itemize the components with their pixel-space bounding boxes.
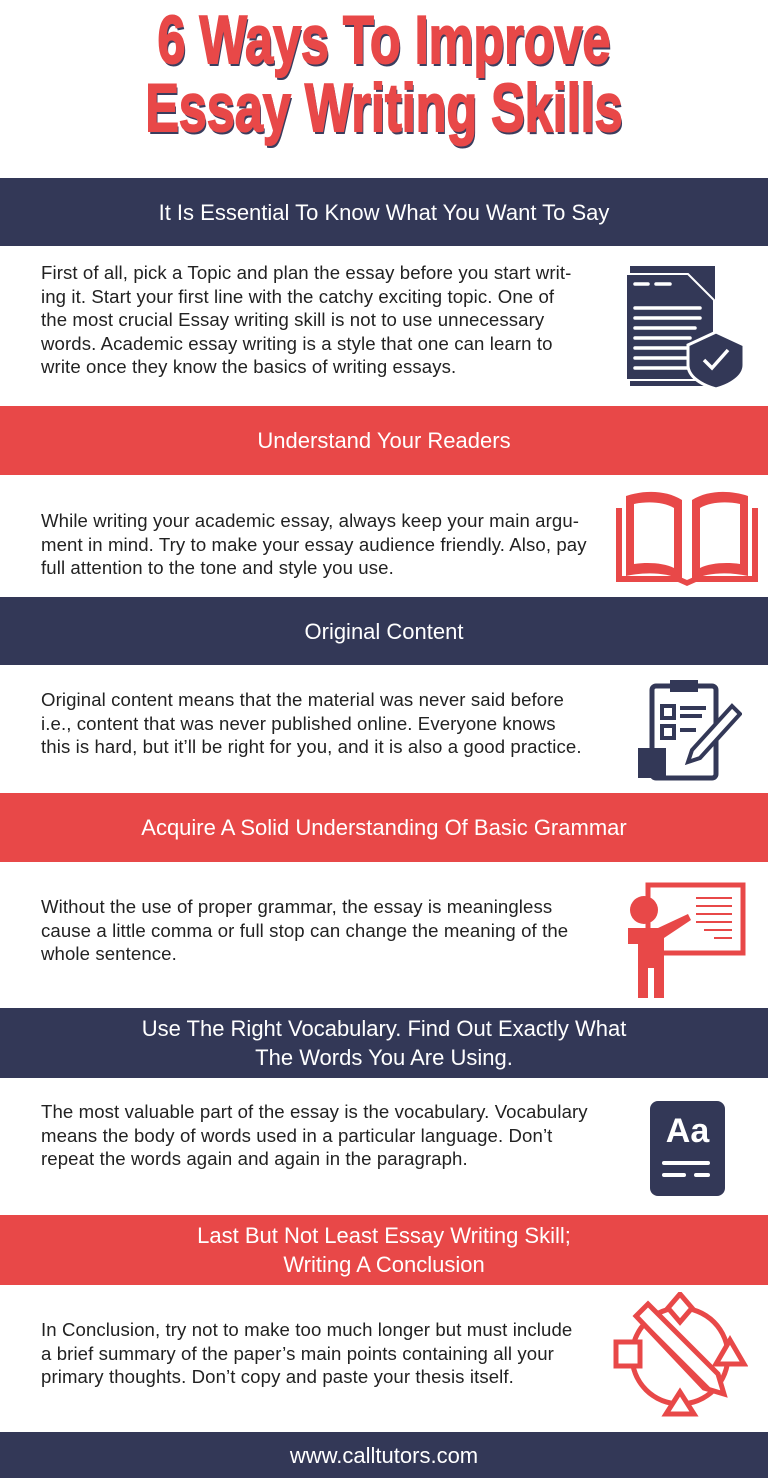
heading band 4 xyxy=(0,793,768,862)
icon: document with shield xyxy=(627,266,742,388)
heading band 5: The Words You Are Using. xyxy=(255,1045,513,1070)
text 3: i.e., content that was never published online. Everyone knows xyxy=(41,712,556,734)
icon: open book xyxy=(616,492,758,586)
heading band 3: Original Content xyxy=(304,618,463,644)
text 2 xyxy=(41,510,587,578)
text 1 xyxy=(41,262,571,377)
heading band 5 xyxy=(0,1008,768,1078)
text 5: repeat the words again and again in the paragraph. xyxy=(41,1148,468,1169)
icon: pencil with shapes xyxy=(614,1292,748,1416)
footer xyxy=(0,1432,768,1478)
heading band 2: Understand Your Readers xyxy=(257,428,511,453)
text 4 xyxy=(41,896,568,964)
text 3: this is hard, but it’ll be right for you, and it is also a good practice. xyxy=(41,736,582,757)
text 6: a brief summary of the paper’s main points containing all your xyxy=(41,1342,554,1364)
footer: www.calltutors.com xyxy=(290,1442,478,1468)
text 4: cause a little comma or full stop can change the meaning of the xyxy=(41,920,568,940)
text 5: means the body of words used in a particular language. Don’t xyxy=(41,1124,552,1146)
text 3: Original content means that the material was never said before xyxy=(41,689,564,710)
text 1: the most crucial Essay writing skill is not to use unnecessary xyxy=(41,309,544,330)
heading band 2 xyxy=(0,406,768,475)
title xyxy=(145,2,623,148)
heading band 6: Writing A Conclusion xyxy=(283,1252,485,1277)
heading band 1: It Is Essential To Know What You Want To Say xyxy=(159,200,609,224)
heading band 6 xyxy=(0,1215,768,1285)
title: Essay Writing Skills xyxy=(145,70,623,146)
icon: Aa: Aa xyxy=(666,1112,709,1150)
text 4: whole sentence. xyxy=(41,943,177,964)
text 5 xyxy=(41,1101,588,1169)
text 1: write once they know the basics of writing essays. xyxy=(41,356,456,377)
text 2: ment in mind. Try to make your essay audience friendly. Also, pay xyxy=(41,534,587,554)
heading band 5: Use The Right Vocabulary. Find Out Exactly What xyxy=(142,1016,626,1041)
text 5: The most valuable part of the essay is the vocabulary. Vocabulary xyxy=(41,1101,588,1122)
icon: teacher at board xyxy=(628,882,746,998)
text 6: primary thoughts. Don’t copy and paste your thesis itself. xyxy=(41,1366,514,1387)
text 4: Without the use of proper grammar, the essay is meaningless xyxy=(41,896,552,917)
text 6 xyxy=(41,1319,572,1387)
heading band 6: Last But Not Least Essay Writing Skill; xyxy=(197,1223,571,1248)
text 2: While writing your academic essay, always keep your main argu- xyxy=(41,510,579,531)
heading band 3 xyxy=(0,597,768,665)
text 1: ing it. Start your first line with the catchy exciting topic. One of xyxy=(41,286,554,306)
text 1: First of all, pick a Topic and plan the essay before you start writ- xyxy=(41,262,571,283)
heading band 1 xyxy=(0,178,768,246)
heading band 4: Acquire A Solid Understanding Of Basic Grammar xyxy=(141,815,627,840)
text 1: words. Academic essay writing is a style that one can learn to xyxy=(41,332,553,354)
text 2: full attention to the tone and style you use. xyxy=(41,557,394,578)
title: 6 Ways To Improve xyxy=(157,2,610,78)
text 6: In Conclusion, try not to make too much longer but must include xyxy=(41,1319,572,1340)
icon: Aa xyxy=(650,1101,725,1196)
icon: clipboard with pen xyxy=(638,680,742,780)
text 3 xyxy=(41,689,582,757)
